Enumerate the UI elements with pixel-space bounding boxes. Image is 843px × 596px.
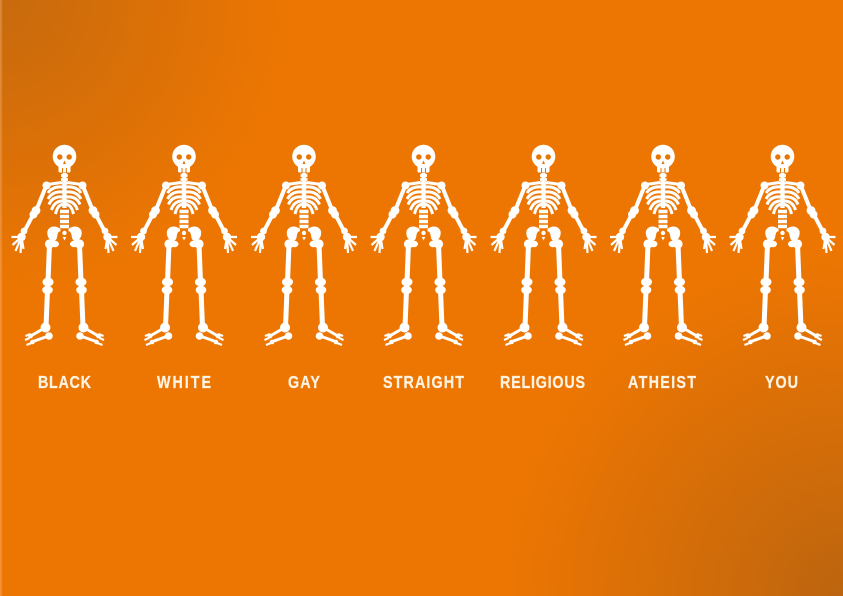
skeleton: religious [490,145,596,345]
label: gay: GAY [288,374,320,392]
label: black: BLACK [38,374,91,392]
label: white: WHITE [157,374,211,392]
skeleton: white [131,145,237,345]
label: straight: STRAIGHT [383,374,464,392]
label: atheist: ATHEIST [628,374,696,392]
skeleton: gay [251,145,357,345]
skeleton: black [12,145,118,345]
skeleton: atheist [610,145,716,345]
label: religious: RELIGIOUS [500,374,585,392]
label: you: YOU [765,374,798,392]
skeleton: straight [370,145,476,345]
skeleton: you [730,145,836,345]
